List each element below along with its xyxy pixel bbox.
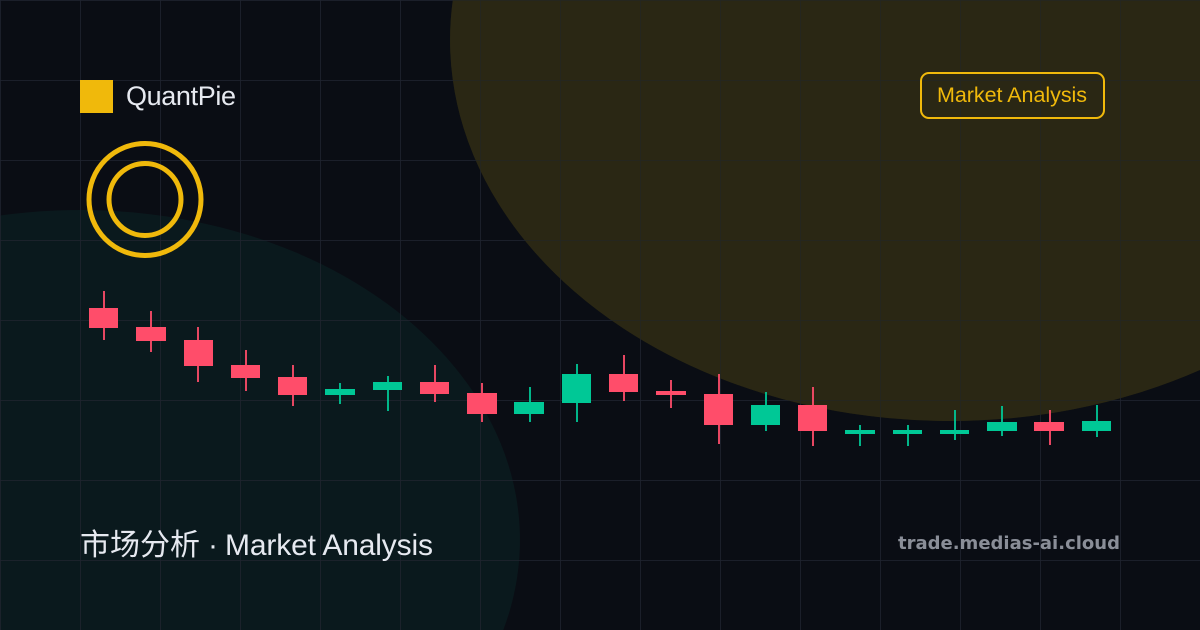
badge: Market Analysis: [921, 73, 1104, 118]
teal background ellipse: [0, 210, 520, 630]
source url: trade.medias-ai.cloud: [898, 533, 1120, 554]
yellow background ellipse: [450, 0, 1200, 421]
badge: Market Analysis: Market Analysis: [937, 83, 1087, 107]
title: ·: [208, 529, 218, 562]
title: Market Analysis: [225, 529, 433, 562]
brand name: QuantPie: [126, 81, 236, 111]
candlestick chart: [89, 291, 1111, 446]
icon: concentric rings: [89, 144, 201, 256]
title: 市场分析: [80, 529, 200, 562]
logo mark square: [80, 80, 113, 113]
